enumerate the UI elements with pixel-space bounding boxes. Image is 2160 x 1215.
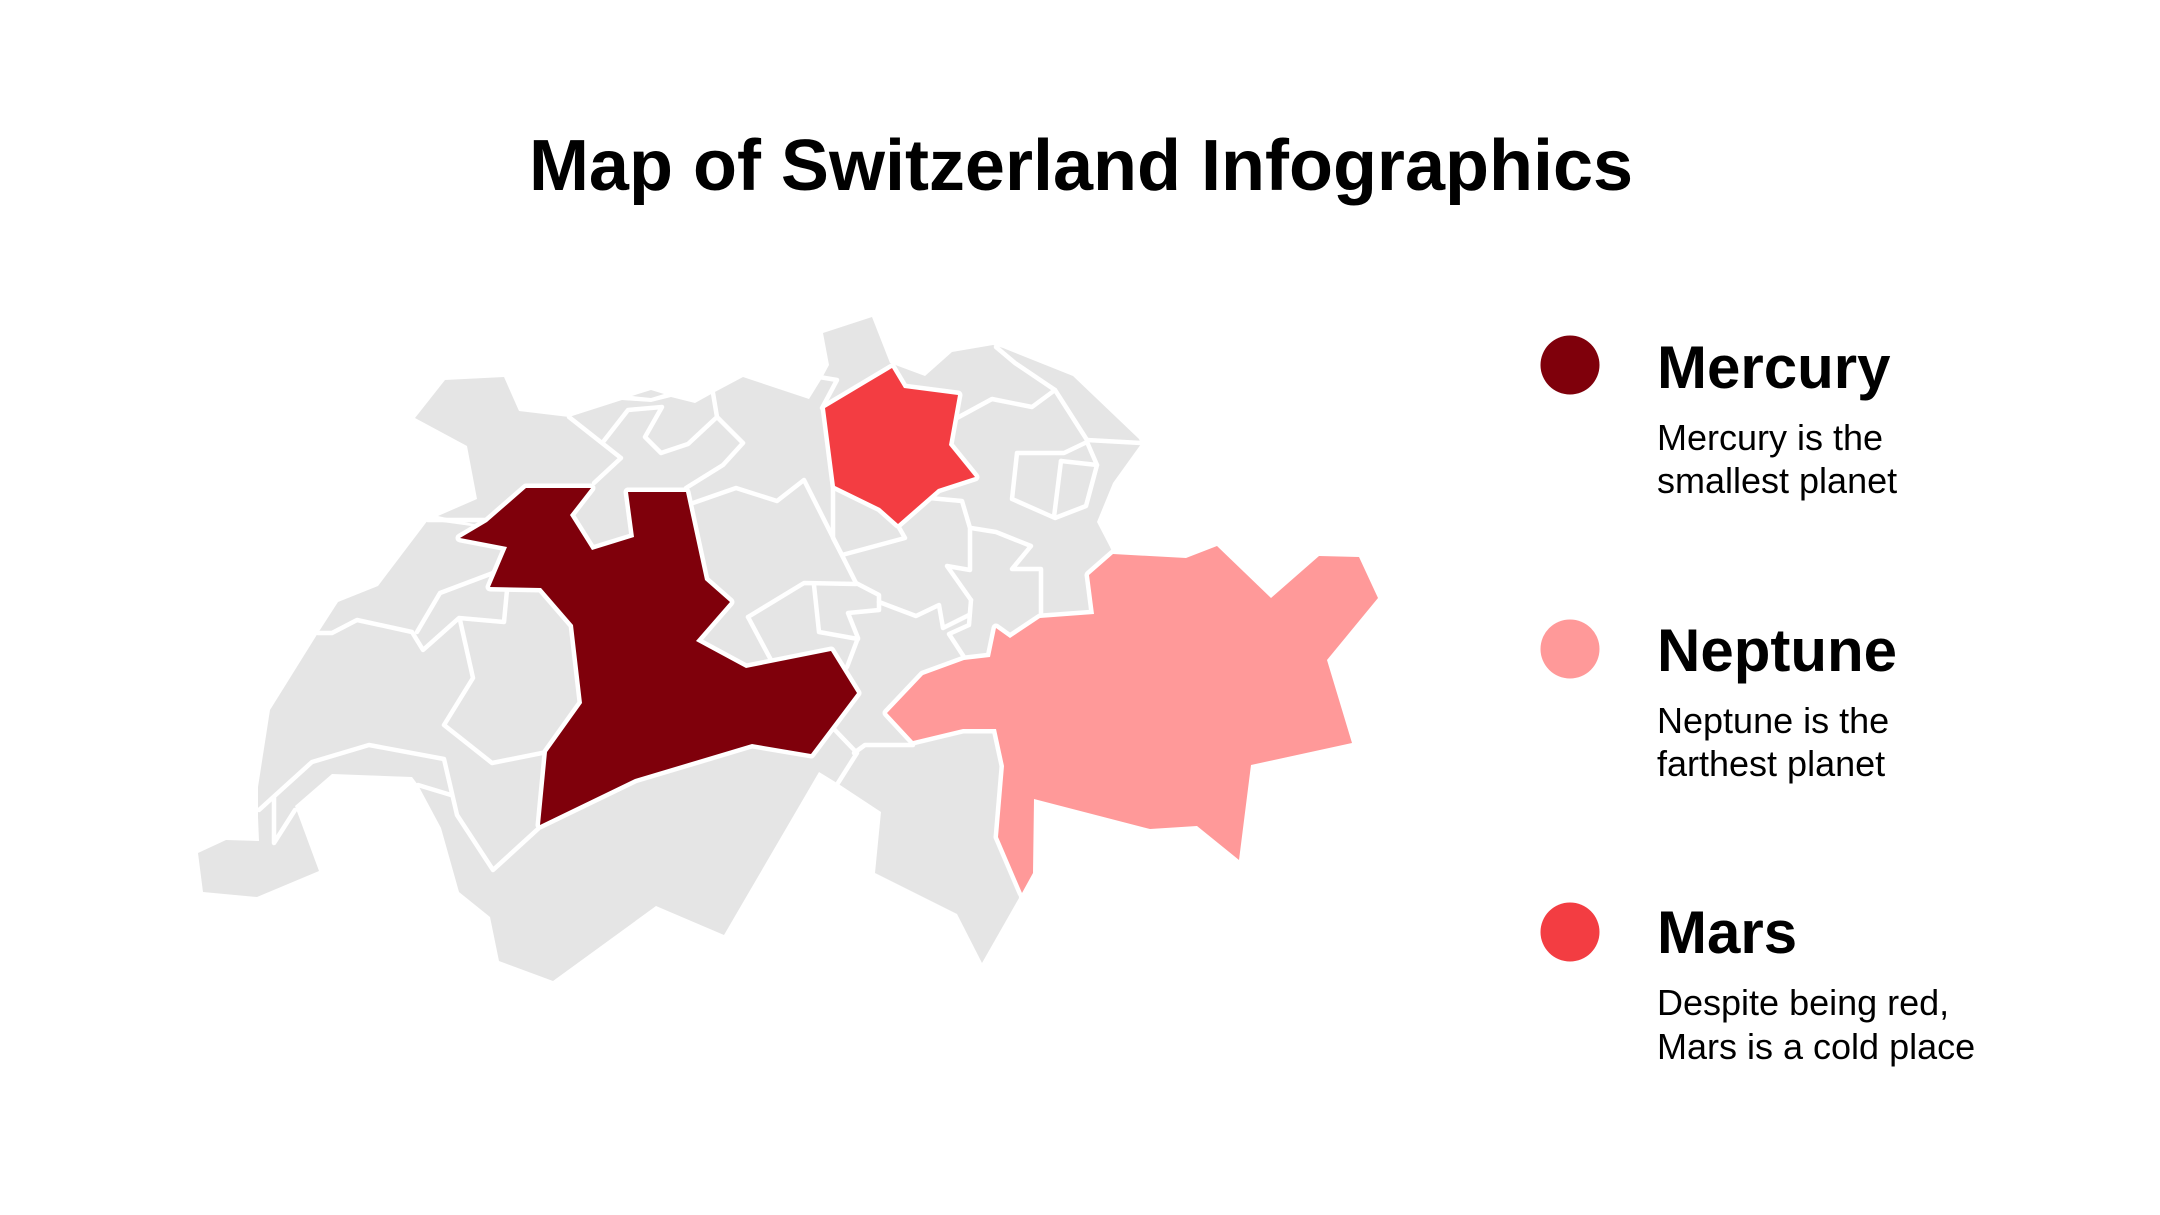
- text: Mercury description: smallest planet: [1657, 460, 1897, 501]
- map: Neptune region: [887, 546, 1378, 893]
- title: Map of Switzerland Infographics: [529, 126, 1633, 206]
- map: grey base silhouette: [198, 317, 1141, 981]
- heading: Mercury: Mercury: [1657, 334, 1891, 401]
- icon: Mercury dot: [1540, 336, 1600, 394]
- icon: Neptune dot: [1540, 620, 1600, 678]
- map: Mars region: [825, 368, 975, 524]
- map: Mercury region: [460, 488, 857, 825]
- legend: Neptune: [1540, 617, 1897, 784]
- legend: Mars: [1540, 899, 1975, 1067]
- heading: Mars: Mars: [1657, 899, 1797, 966]
- text: Mars description: Mars is a cold place: [1657, 1026, 1975, 1067]
- text: Mars description: Despite being red,: [1657, 982, 1949, 1023]
- text: Mercury description: Mercury is the: [1657, 417, 1883, 458]
- legend: Mercury: [1540, 334, 1897, 501]
- icon: Mars dot: [1540, 902, 1600, 962]
- map: canton borders: [259, 347, 1141, 870]
- text: Neptune description: farthest planet: [1657, 743, 1885, 784]
- map of Switzerland: [198, 317, 1378, 981]
- map: small lake-side enclave: [632, 390, 664, 398]
- heading: Neptune: Neptune: [1657, 617, 1897, 684]
- text: Neptune description: Neptune is the: [1657, 700, 1889, 741]
